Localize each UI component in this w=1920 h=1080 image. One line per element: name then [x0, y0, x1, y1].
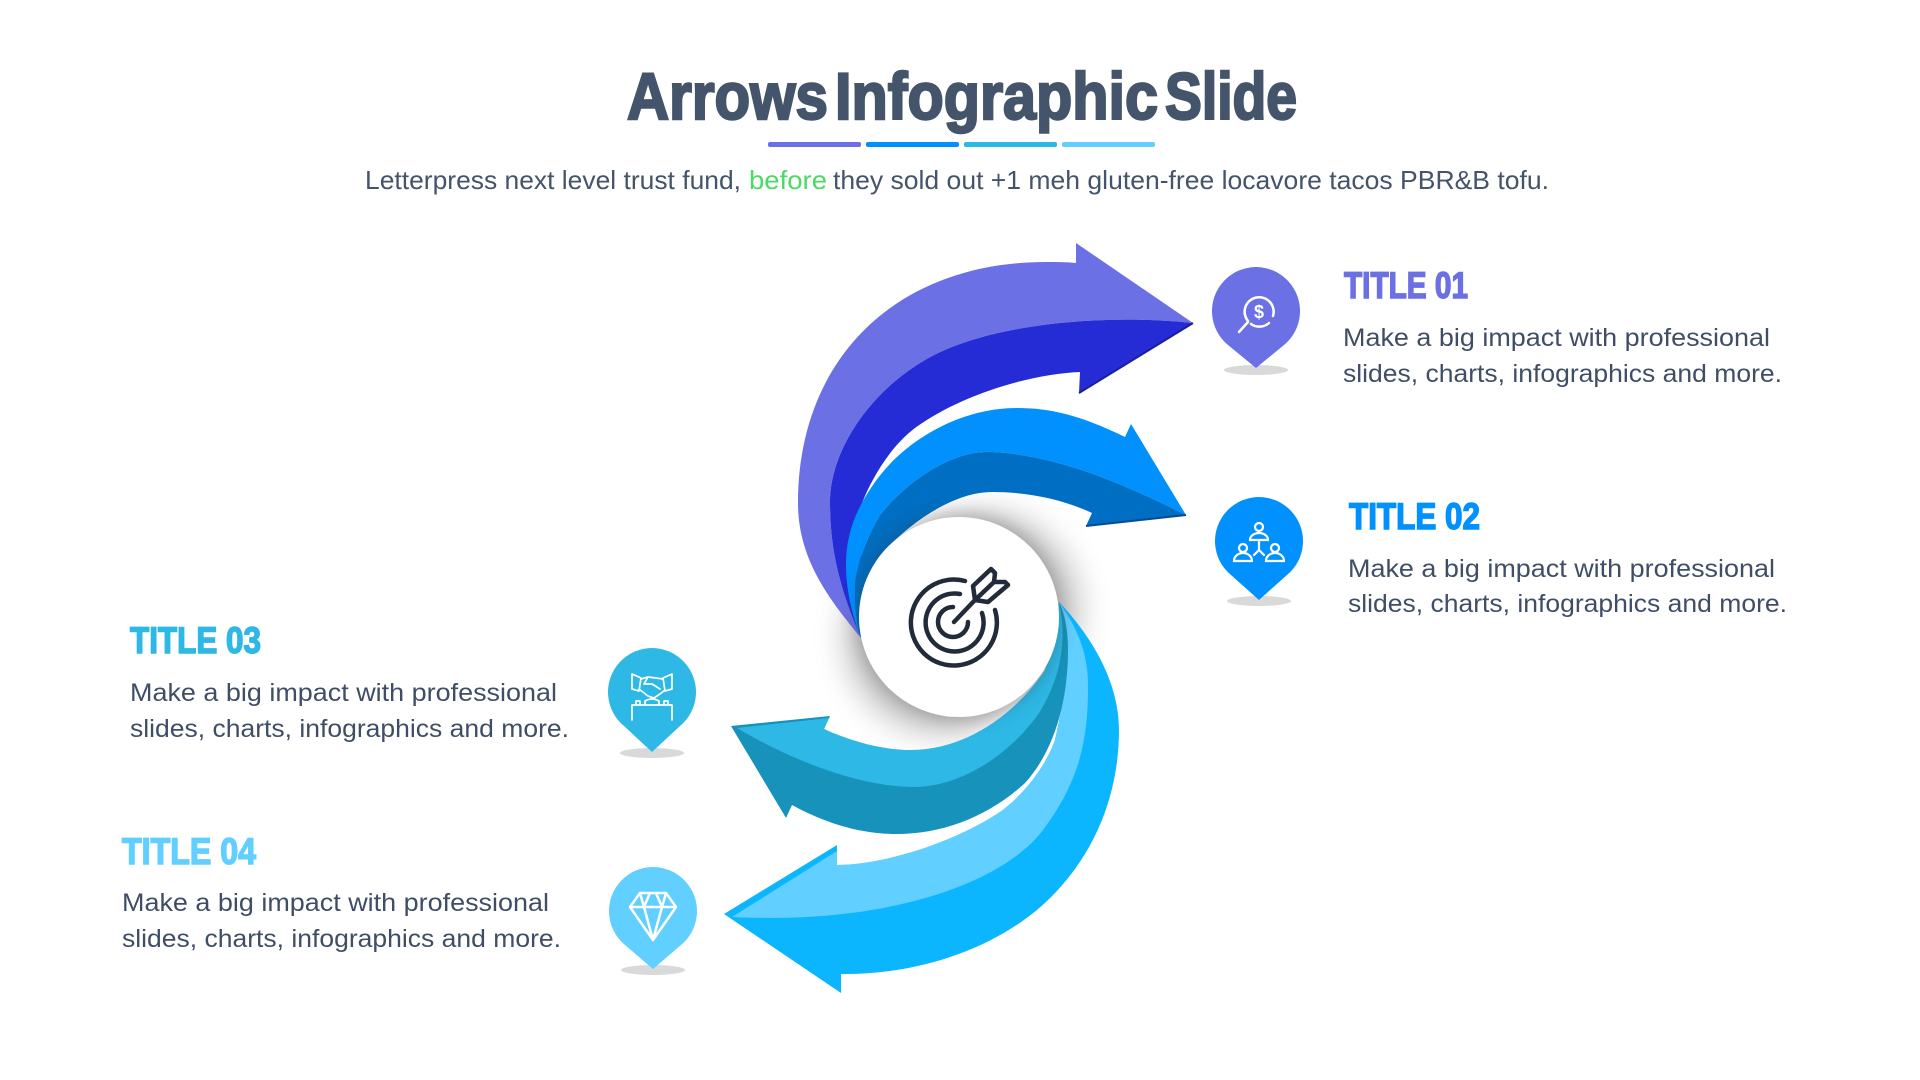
text block: title 03: [130, 620, 569, 743]
arrow 1: purple: [798, 243, 1193, 638]
text block: title 01: slides, charts, infographics and more.: [1343, 360, 1782, 388]
subtitle: [365, 165, 1549, 195]
centre circle: [859, 517, 1059, 717]
subtitle: Letterpress next level trust fund,: [365, 165, 741, 195]
text block: title 02: [1348, 496, 1787, 618]
circle cast shadow: [844, 512, 1080, 734]
text block: title 02: Make a big impact with professional: [1348, 555, 1775, 583]
pin 3: handshake and briefcase: [608, 648, 696, 758]
subtitle: they sold out +1 meh gluten-free locavore tacos PBR&B tofu.: [833, 165, 1549, 195]
text block: title 03: Make a big impact with professional: [130, 679, 557, 707]
subtitle: before: [749, 165, 827, 195]
text block: title 02: slides, charts, infographics and more.: [1348, 590, 1787, 618]
text block: title 01: Make a big impact with professional: [1343, 324, 1770, 352]
circle contact shadow on arrows: [855, 513, 1063, 721]
text block: title 04: slides, charts, infographics and more.: [122, 925, 561, 953]
pin 1: dollar search: [1212, 267, 1300, 375]
pin 4: diamond: [609, 867, 697, 975]
text block: title 03: TITLE 03: [130, 620, 261, 661]
icon: target with arrow: [911, 569, 1008, 666]
text block: title 04: Make a big impact with professional: [122, 889, 549, 917]
title: Slide: [1165, 59, 1297, 133]
text block: title 04: [122, 831, 561, 953]
text block: title 02: TITLE 02: [1349, 496, 1480, 537]
arrow 4: light blue: [724, 602, 1119, 993]
text block: title 01: TITLE 01: [1344, 265, 1468, 306]
arrow 2: blue: [846, 408, 1186, 638]
text block: title 01: [1343, 265, 1782, 388]
title underline bars: [768, 142, 1155, 147]
pin 1: dollar search: $: [1254, 302, 1264, 322]
title: Infographic: [835, 59, 1158, 133]
arrow 3: teal blue: [731, 602, 1068, 834]
title: Arrows: [627, 59, 828, 133]
title: [627, 59, 1297, 133]
pin 2: people hierarchy: [1215, 497, 1303, 606]
text block: title 03: slides, charts, infographics and more.: [130, 715, 569, 743]
text block: title 04: TITLE 04: [122, 831, 256, 872]
